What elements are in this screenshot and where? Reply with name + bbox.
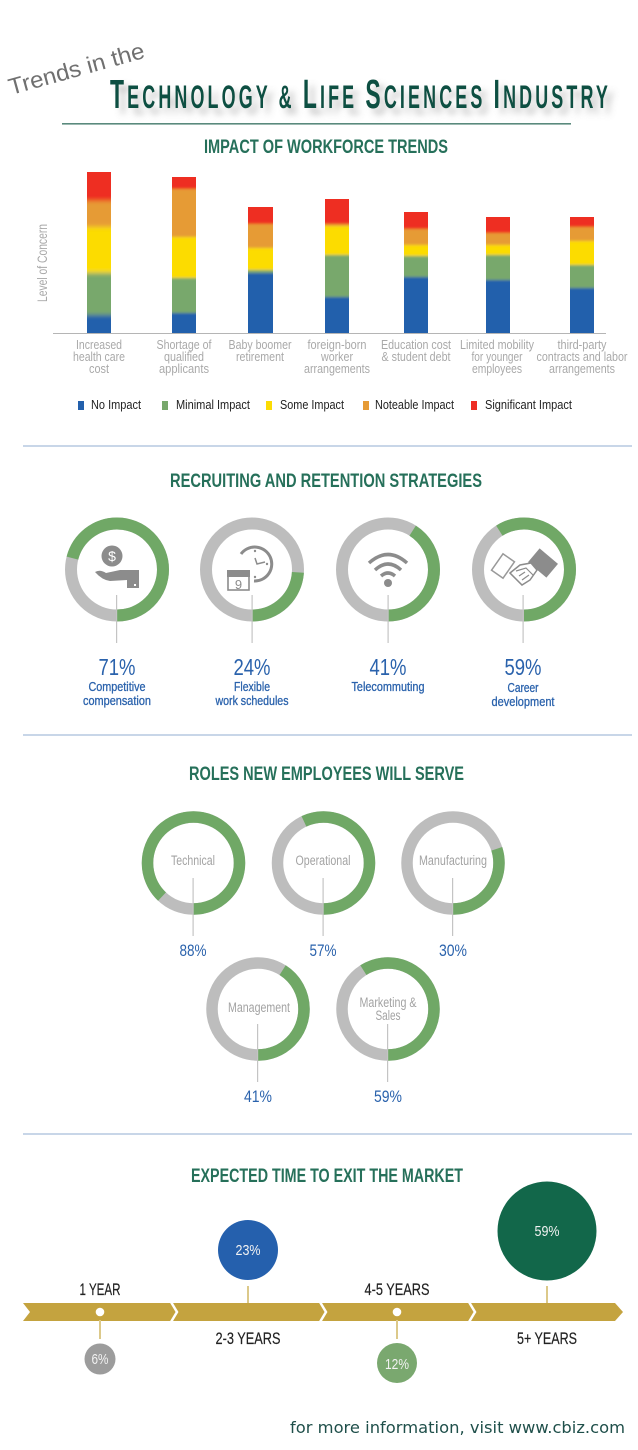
category labels: retirement [236,349,284,364]
donut: competitive compensation: compensation [83,693,151,708]
category labels: Limited mobility [460,337,534,352]
icon: handshake [492,548,558,585]
timeline arrow bar [23,1302,623,1322]
category labels: foreign-born [308,337,366,352]
milestone: 4-5 years: 4-5 YEARS [364,1280,430,1299]
milestone: 2-3 years: 23% [236,1242,260,1259]
donut: flexible work schedules [206,524,298,708]
category labels: Shortage of [156,337,212,352]
stacked bar chart [35,160,628,412]
icon: hand holding coin [95,546,139,588]
category labels: employees [472,361,522,376]
category labels: Baby boomer [228,337,292,352]
heading: roles new employees will serve: ROLES NEW EMPLOYEES WILL SERVE [189,764,464,785]
donut: marketing and sales: 59% [374,1087,402,1106]
donut: operational: Operational [296,853,350,868]
donut: manufacturing: 30% [439,941,467,960]
category labels: Increased [76,337,122,352]
donut: technical: 88% [180,941,206,960]
donut: technical: Technical [171,853,215,868]
donut: telecommuting: Telecommuting [352,679,424,694]
heading: expected time to exit the market: EXPECTED TIME TO EXIT THE MARKET [191,1166,463,1187]
donut: manufacturing: Manufacturing [419,853,487,868]
category labels: for younger [472,349,523,364]
donut: manufacturing [407,817,499,960]
category labels: Education cost [381,337,451,352]
category labels: cost [89,361,109,376]
donut: marketing and sales: Sales [376,1008,401,1023]
legend: Minimal Impact [176,397,250,412]
header: trends in the: Trends in the [5,37,147,100]
donut: career development [478,524,570,709]
donut: telecommuting: 41% [370,654,406,680]
category labels: health care [73,349,125,364]
panel: recruiting strategies donuts [71,524,570,709]
donut: operational [278,817,370,960]
heading: impact of workforce trends: IMPACT OF WORKFORCE TRENDS [204,137,448,158]
milestone: 4-5 years [364,1280,430,1383]
bar: baby boomer retirement [248,207,273,333]
milestone: 1 year: 6% [92,1351,108,1368]
donut: career development: 59% [504,654,542,680]
category labels: qualified [164,349,204,364]
donut: flexible work schedules: 24% [234,654,270,680]
icon: hand holding coin: $ [108,548,116,564]
legend: Some Impact [280,397,344,412]
bar: limited mobility for younger employees [486,217,510,333]
donut: management: 41% [244,1087,272,1106]
bar: third-party contracts and labor arrangements [570,217,594,333]
donut: marketing and sales [342,963,434,1106]
legend: Noteable Impact [375,397,454,412]
title rule [62,123,571,125]
category labels [73,337,628,376]
donut: competitive compensation [71,524,163,708]
y axis label: Level of Concern [35,224,50,302]
bar: education cost and student debt [404,212,428,333]
milestone: 1 year: 1 YEAR [80,1280,120,1299]
donut: telecommuting [342,524,434,694]
donut: competitive compensation: Competitive [88,679,146,694]
icon: clock and calendar [227,547,272,592]
category labels: worker [320,349,354,364]
donut: flexible work schedules: Flexible [234,679,270,694]
milestone: 5+ years: 5+ YEARS [517,1329,577,1348]
legend: Significant Impact [485,397,572,412]
donut: management [212,963,304,1106]
bar: shortage of qualified applicants [172,177,196,333]
milestone: 5+ years: 59% [534,1223,560,1240]
category labels: applicants [159,361,209,376]
milestone: 2-3 years [216,1220,280,1348]
category labels: third-party [558,337,607,352]
icon: wifi [369,554,407,587]
donut: career development: development [492,694,555,709]
milestone: 5+ years [498,1182,596,1348]
legend: No Impact [91,397,141,412]
milestone: 2-3 years: 2-3 YEARS [216,1329,280,1348]
timeline [23,1182,623,1383]
heading: recruiting and retention strategies: RECRUITING AND RETENTION STRATEGIES [170,471,482,492]
donut: marketing and sales: Marketing & [360,995,416,1010]
bar: increased health care cost [87,172,111,333]
legend [78,397,572,412]
panel: roles donuts [148,817,499,1106]
donut: competitive compensation: 71% [98,654,136,680]
donut: management: Management [228,1000,290,1015]
milestone: 1 year [80,1280,120,1374]
footer: more information: for more information, visit www.cbiz.com [290,1418,625,1437]
title: TECHNOLOGY & LIFE SCIENCES INDUSTRY [110,72,608,118]
donut: technical [148,817,240,960]
icon: clock and calendar: 9 [235,577,242,592]
category labels: & student debt [382,349,451,364]
donut: operational: 57% [310,941,336,960]
bar: foreign-born worker arrangements [325,199,349,333]
milestone: 4-5 years: 12% [385,1356,409,1373]
category labels: arrangements [549,361,615,376]
category labels: arrangements [304,361,370,376]
donut: flexible work schedules: work schedules [215,693,289,708]
donut: career development: Career [508,680,539,695]
